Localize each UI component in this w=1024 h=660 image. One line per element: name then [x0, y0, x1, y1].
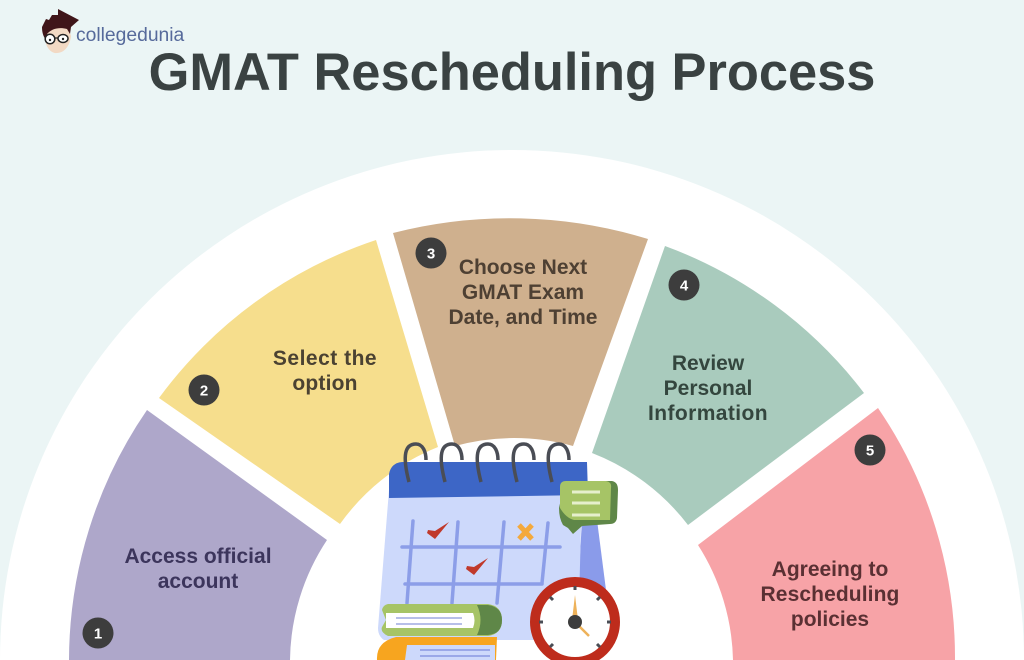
icon: speech bubble [559, 481, 618, 534]
label 1: Access official [124, 545, 272, 568]
segment 1: access official account [69, 410, 327, 660]
icon: books [377, 604, 502, 660]
white semicircle backdrop [0, 150, 1024, 660]
badge 5 [854, 434, 886, 466]
badge 3 [416, 238, 446, 268]
orange cross [519, 525, 532, 539]
label 4: Review [672, 352, 745, 375]
rings [405, 444, 569, 482]
orange book [377, 637, 497, 660]
green book [382, 604, 502, 636]
logo mascot icon [42, 9, 79, 53]
label 5: policies [791, 608, 869, 631]
icon: clock [535, 582, 615, 660]
badge 1 [82, 618, 114, 648]
label 3: Date, and Time [448, 306, 598, 329]
label 5: Rescheduling [761, 583, 899, 606]
logo wordmark: collegedunia [76, 25, 185, 46]
label 2: option [292, 372, 358, 395]
calendar grid [402, 521, 560, 603]
badge 5: 5 [866, 442, 874, 460]
label 5: Agreeing to [772, 558, 888, 581]
label 3: Choose Next [459, 256, 587, 279]
label 4: Personal [664, 377, 752, 400]
badge 2: 2 [200, 382, 208, 400]
calendar back page [578, 520, 606, 590]
calendar page [378, 490, 582, 640]
label 2: Select the [273, 347, 377, 370]
badge 4 [668, 270, 700, 300]
badge 2 [188, 374, 220, 406]
title: GMAT Rescheduling Process [149, 44, 875, 102]
check marks [427, 522, 488, 575]
segment 5: agreeing to policies [698, 408, 955, 660]
logo: collegedunia [42, 9, 185, 53]
label 3: GMAT Exam [462, 281, 584, 304]
segment 3: choose next exam date [393, 218, 648, 446]
segment 4: review personal information [592, 246, 864, 525]
segment 2: select the option [159, 240, 438, 524]
icon: calendar [378, 444, 606, 640]
badge 4: 4 [680, 278, 689, 294]
label 1: account [158, 570, 238, 593]
label 4: Information [648, 402, 768, 425]
badge 1: 1 [94, 626, 102, 642]
calendar header [389, 462, 588, 498]
badge 3: 3 [427, 246, 435, 262]
